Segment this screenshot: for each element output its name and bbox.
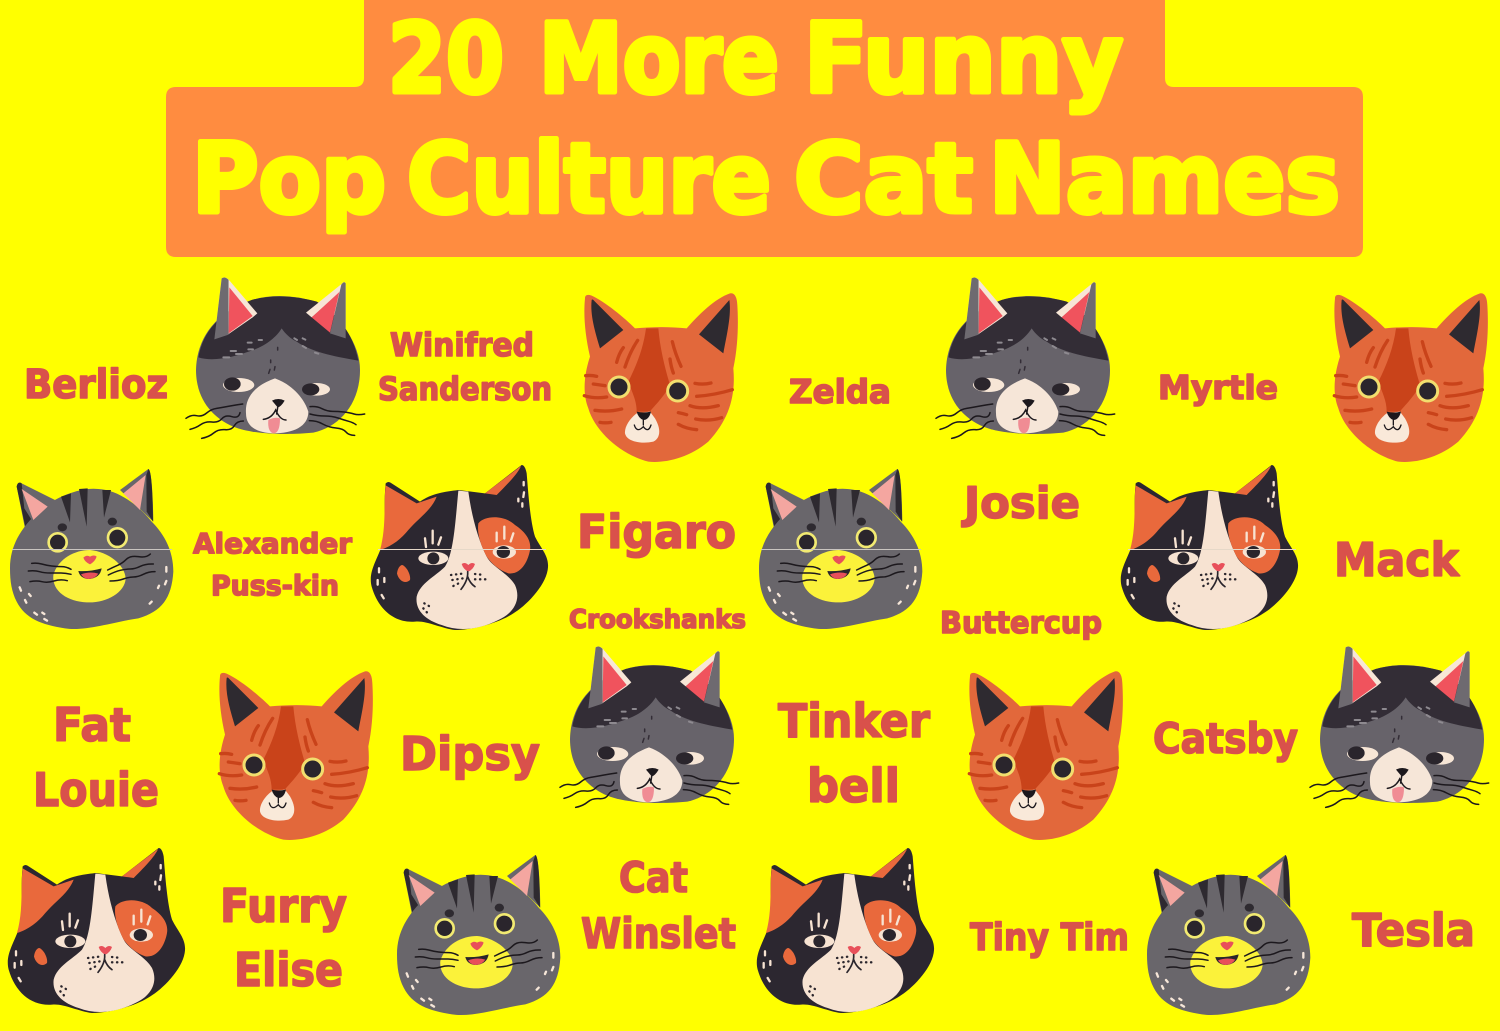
icon: tabby cat 2 [759,469,922,629]
cat name: Crookshanks: Crookshanks [569,605,746,635]
cat name: Zelda: Zelda [789,372,891,411]
cat name: Myrtle: Myrtle [1158,368,1278,407]
cat name: Furry Elise: Elise [234,943,343,997]
cat name: Tinker bell [778,694,930,813]
icon: tuxedo cat 1 [186,277,365,438]
cat name: Alexander Puss-kin: Puss-kin [211,569,339,602]
cat name: Tesla: Tesla [1352,904,1475,957]
cat name: Furry Elise [220,879,347,997]
cat name: Winifred Sanderson: Sanderson [378,370,552,408]
cat name: Winifred Sanderson [378,326,552,408]
title: 20 [388,3,504,115]
icon: orange cat 2 [1334,293,1488,462]
title: Pop [192,123,386,235]
icon: tabby cat 1 [10,469,173,629]
title: Culture [407,123,771,235]
icon: calico cat 4 [757,848,934,1013]
icon: orange cat 4 [969,671,1123,840]
icon: orange cat 1 [584,293,738,462]
icon: calico cat 2 [1121,465,1298,630]
cat name: Catsby: Catsby [1153,714,1298,763]
cat name: Tinker bell: bell [807,759,900,813]
cat name: Fat Louie: Fat [53,698,131,752]
cat name: Alexander Puss-kin: Alexander [193,527,352,560]
title: Funny [804,3,1123,115]
title banner [166,0,1363,257]
cat name: Cat Winslet: Winslet [581,909,736,958]
icon: tabby cat 4 [1147,855,1310,1015]
cat name: Tinker bell: Tinker [778,694,930,748]
cat name: Winifred Sanderson: Winifred [390,326,534,364]
cat name: Cat Winslet [581,853,736,958]
cat name: Cat Winslet: Cat [619,853,688,902]
cat name: Tiny Tim: Tiny Tim [970,916,1129,959]
title: More [539,3,779,115]
cat name: Berlioz: Berlioz [24,362,168,408]
title [192,3,1340,235]
icon: tuxedo cat 4 [1310,646,1489,807]
cat name: Fat Louie [33,698,159,817]
title: Cat [794,123,973,235]
cat name: Alexander Puss-kin [193,527,352,602]
cat name: Dipsy: Dipsy [400,727,540,781]
icon: calico cat 3 [8,848,185,1013]
title: Names [989,123,1340,235]
cat name: Mack: Mack [1334,533,1460,587]
cat name: Josie: Josie [961,478,1080,529]
cat name: Fat Louie: Louie [33,763,159,817]
cat name: Furry Elise: Furry [220,879,347,933]
icon: tuxedo cat 3 [560,646,739,807]
icon: orange cat 3 [219,671,373,840]
icon: tabby cat 3 [397,855,560,1015]
cat name: Buttercup: Buttercup [940,606,1102,641]
icon: calico cat 1 [371,465,548,630]
icon: tuxedo cat 2 [936,277,1115,438]
cat name: Figaro: Figaro [577,505,736,559]
